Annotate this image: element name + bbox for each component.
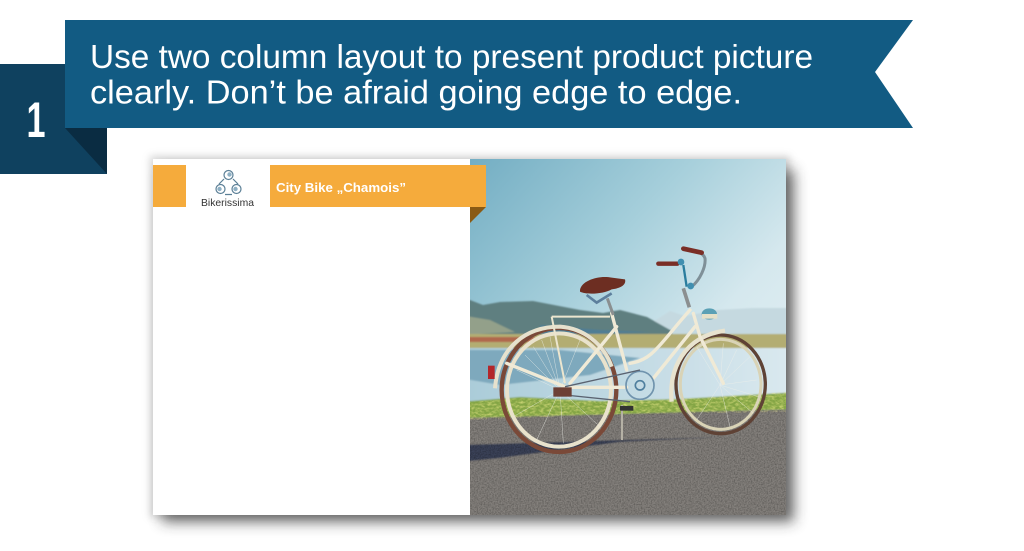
handlebar stem [683, 288, 689, 307]
chainring [626, 371, 654, 399]
handlebars [692, 251, 705, 287]
spokes [513, 337, 758, 443]
product title ribbon [270, 165, 486, 223]
heading text [90, 38, 813, 110]
brand logo [201, 170, 254, 209]
saddle [580, 277, 625, 294]
heading text: Use two column layout to present product picture [90, 38, 813, 75]
rear hub [553, 387, 572, 397]
product title: City Bike „Chamois” [276, 181, 406, 195]
road texture [470, 408, 786, 516]
logo icon [216, 170, 241, 194]
grass texture [470, 392, 786, 420]
front fender [671, 331, 725, 402]
rear rack [552, 317, 610, 383]
kickstand [621, 405, 623, 440]
product photo: bicycle [470, 159, 786, 515]
ribbon fold [470, 207, 486, 223]
orange side tab [153, 165, 186, 207]
slide shadow [150, 156, 794, 522]
front wheel [676, 335, 765, 434]
bell lamp [702, 308, 717, 320]
frame [507, 310, 723, 387]
chain [565, 370, 640, 402]
slide panel [153, 150, 800, 530]
tail light [488, 366, 495, 379]
seat post [607, 298, 613, 315]
heading text: clearly. Don’t be afraid going edge to edge. [90, 74, 742, 110]
pedal [620, 406, 633, 411]
rear wheel [502, 328, 616, 452]
number 1: 1 [26, 92, 46, 148]
bicycle [488, 249, 765, 452]
heading ribbon [65, 20, 913, 128]
logo wordmark: Bikerissima [201, 197, 254, 209]
number tab [0, 64, 107, 174]
saddle springs [587, 293, 612, 303]
ribbon fold [65, 128, 107, 174]
left white column [153, 159, 470, 515]
rear fender [495, 327, 612, 388]
